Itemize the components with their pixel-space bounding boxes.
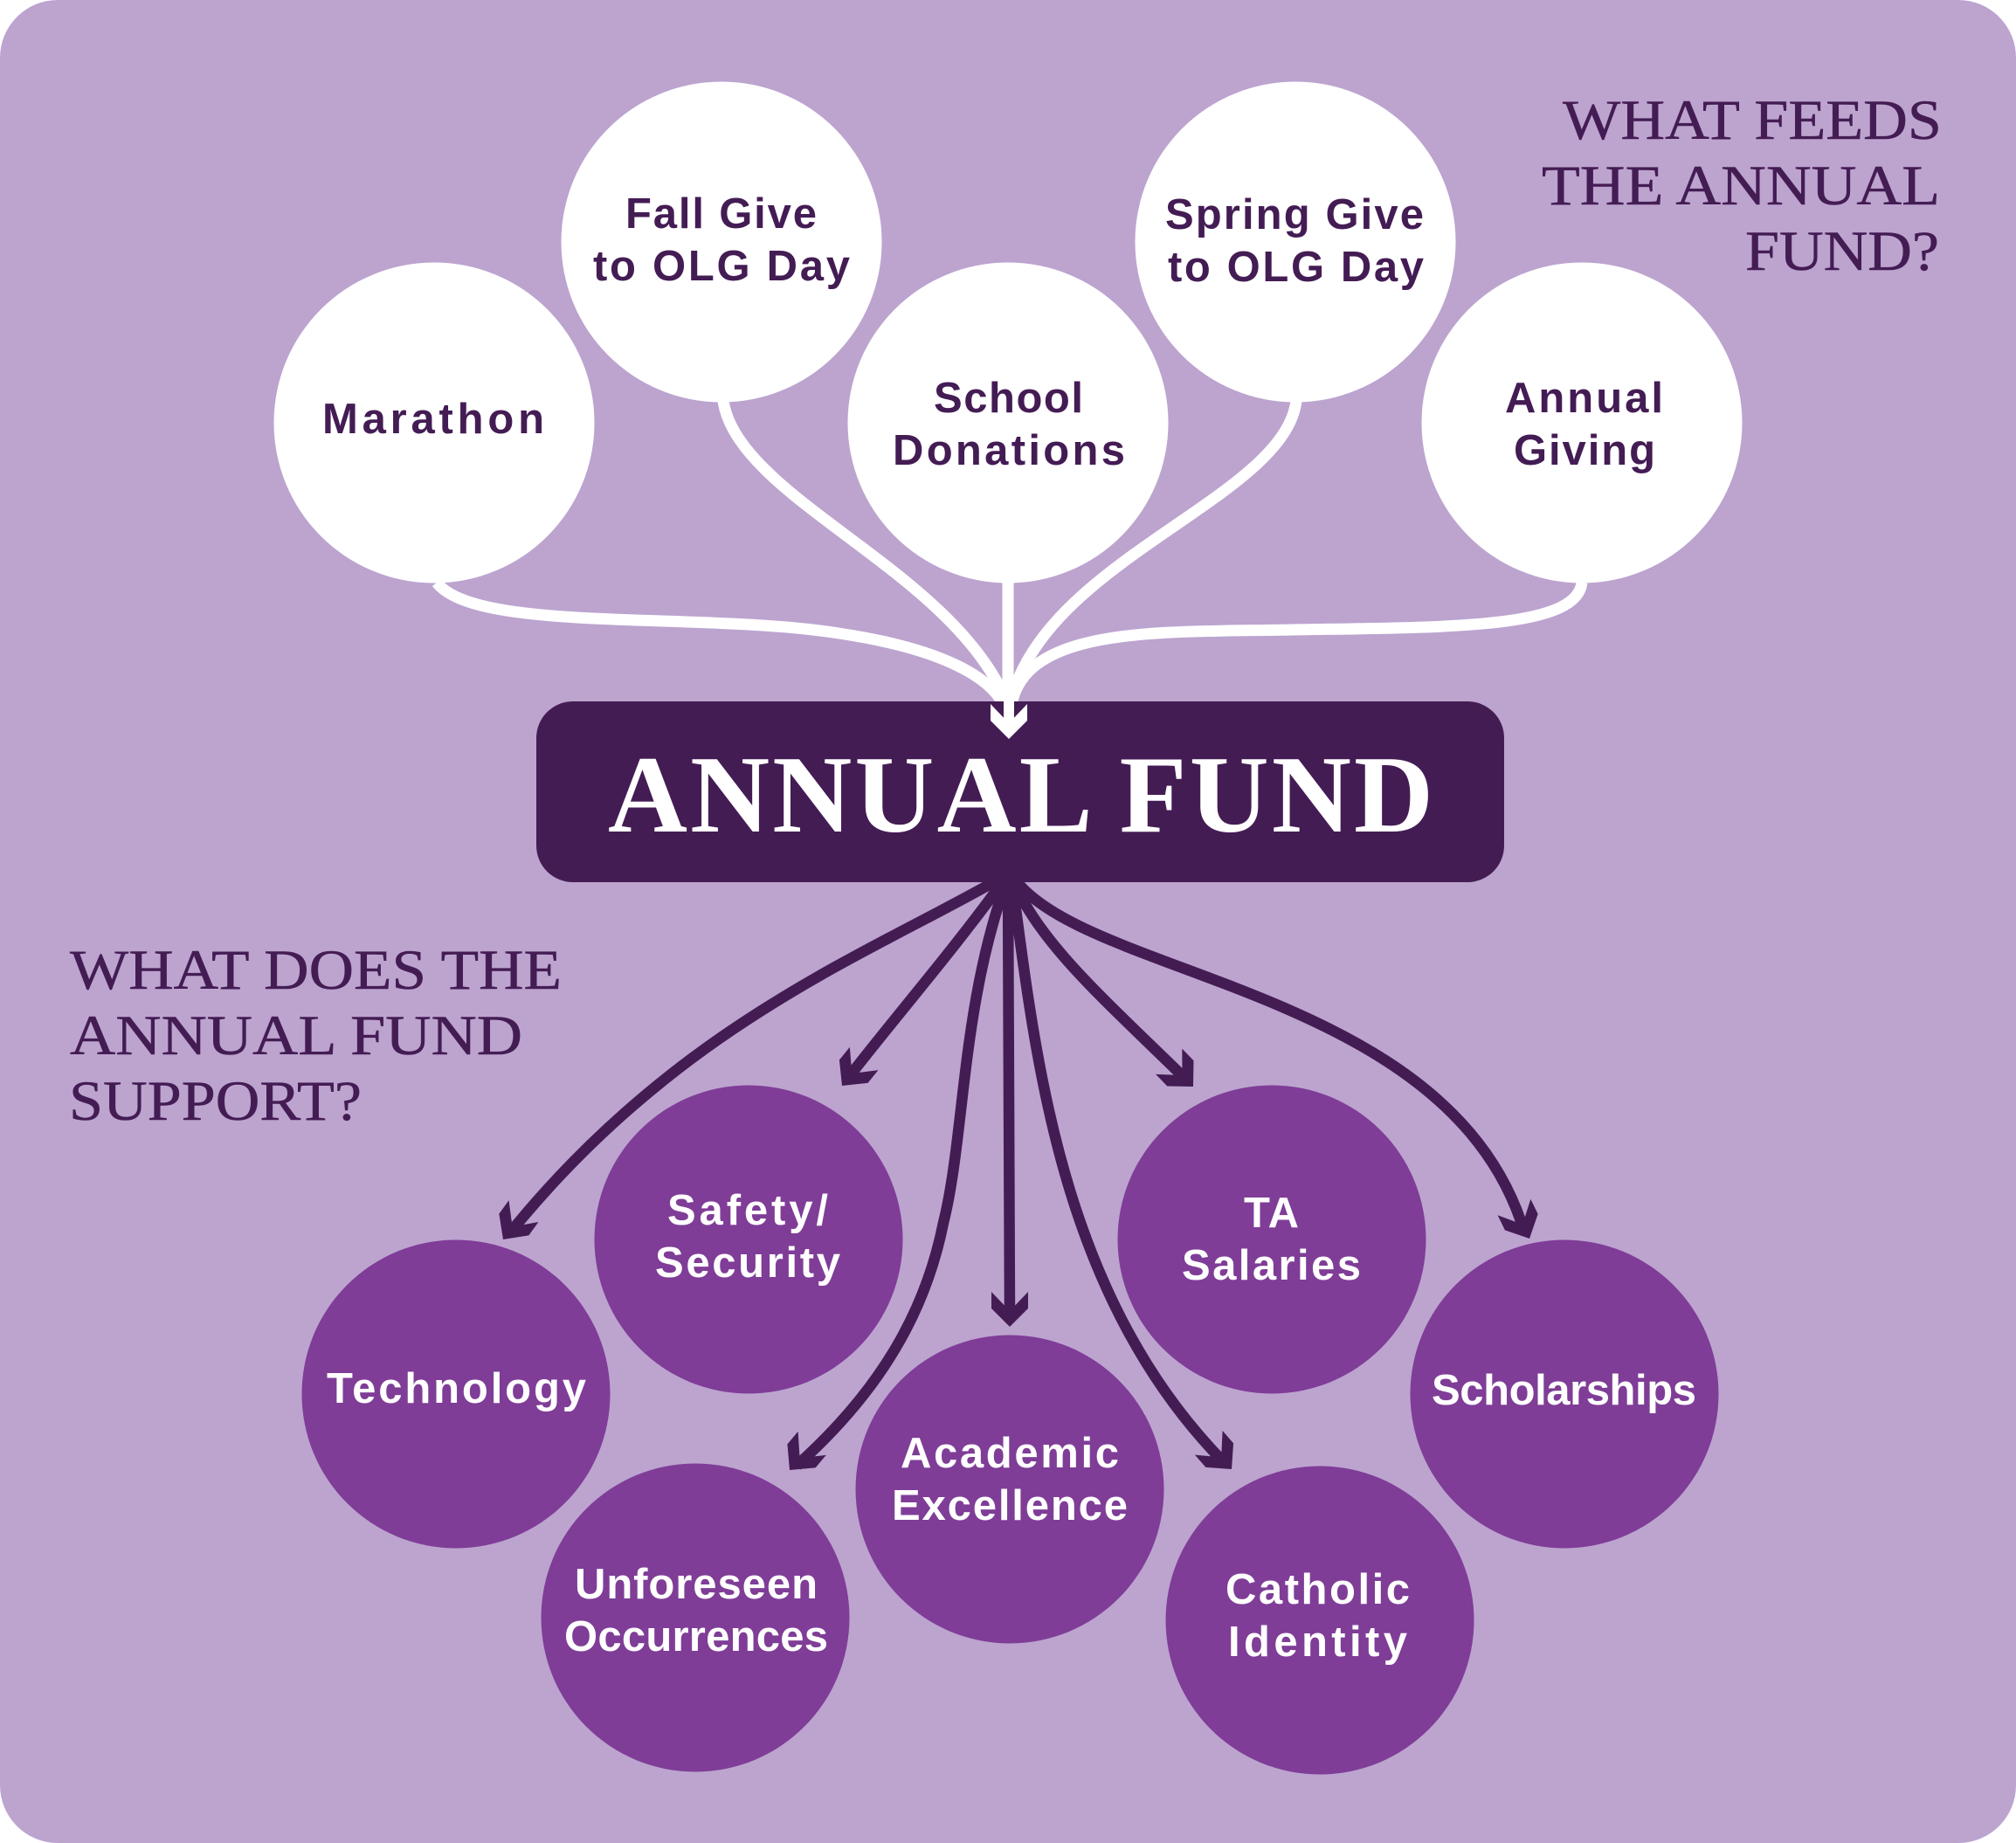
support: Catholic Identity: Catholic bbox=[1225, 1566, 1410, 1613]
source: Marathon: Marathon bbox=[322, 396, 544, 443]
support: Technology bbox=[302, 1240, 610, 1548]
heading: what does the annual fund support: SUPPORT? bbox=[69, 1070, 362, 1133]
arrowheads: supported areas bbox=[488, 1047, 1546, 1481]
arrows: funding sources into annual fund bbox=[437, 401, 1582, 725]
support: Academic Excellence: Academic bbox=[901, 1430, 1119, 1477]
support: Scholarships bbox=[1410, 1240, 1719, 1548]
heading: what feeds the annual fund: THE ANNUAL bbox=[1542, 155, 1940, 217]
support: Safety/Security: Security bbox=[655, 1239, 840, 1287]
source: Fall Give to OLG Day: Fall Give bbox=[625, 190, 817, 238]
source: Fall Give to OLG Day bbox=[561, 82, 882, 402]
heading: what feeds the annual fund bbox=[1542, 89, 1942, 283]
source: Annual Giving bbox=[1422, 262, 1742, 583]
support: Technology: Technology bbox=[327, 1365, 586, 1412]
support: Catholic Identity: Identity bbox=[1228, 1619, 1407, 1666]
heading: what feeds the annual fund: WHAT FEEDS bbox=[1563, 89, 1942, 152]
arrow: white arrowhead into annual fund bbox=[991, 690, 1027, 739]
support: Academic Excellence bbox=[856, 1335, 1163, 1644]
source: School Donations: School bbox=[934, 375, 1083, 422]
support: Scholarships: Scholarships bbox=[1432, 1367, 1696, 1414]
source: Spring Give to OLG Day: Spring Give bbox=[1165, 191, 1424, 238]
heading: what does the annual fund support: WHAT DOES THE bbox=[70, 939, 562, 1002]
source: Spring Give to OLG Day bbox=[1136, 82, 1455, 402]
source: Fall Give to OLG Day: to OLG Day bbox=[593, 243, 850, 290]
support: Safety/Security bbox=[594, 1085, 903, 1394]
heading: what does the annual fund support bbox=[69, 939, 562, 1133]
support: TA Salaries: TA bbox=[1244, 1190, 1299, 1237]
source: Annual Giving: Annual bbox=[1505, 375, 1663, 422]
support: Unforeseen Occurrences: Occurrences bbox=[564, 1613, 828, 1660]
heading: what feeds the annual fund: FUND? bbox=[1745, 220, 1939, 283]
support: Unforeseen Occurrences bbox=[542, 1464, 849, 1771]
support: Academic Excellence: Excellence bbox=[892, 1482, 1128, 1529]
support: TA Salaries: Salaries bbox=[1182, 1242, 1361, 1289]
arrows: annual fund out to supported areas bbox=[511, 877, 1524, 1466]
source: Marathon bbox=[274, 262, 594, 583]
source: Spring Give to OLG Day: to OLG Day bbox=[1168, 244, 1424, 291]
support: Unforeseen Occurrences: Unforeseen bbox=[575, 1561, 818, 1608]
central box: Annual Fund bbox=[536, 701, 1504, 882]
source: School Donations bbox=[847, 262, 1169, 583]
support: TA Salaries bbox=[1118, 1085, 1426, 1394]
source: Annual Giving: Giving bbox=[1514, 427, 1655, 474]
heading: what does the annual fund support: ANNUAL FUND bbox=[70, 1004, 522, 1067]
support: Catholic Identity bbox=[1165, 1466, 1474, 1775]
support: Safety/Security: Safety/ bbox=[667, 1187, 828, 1234]
source: School Donations: Donations bbox=[893, 427, 1125, 474]
central box: Annual Fund: ANNUAL FUND bbox=[608, 735, 1433, 856]
